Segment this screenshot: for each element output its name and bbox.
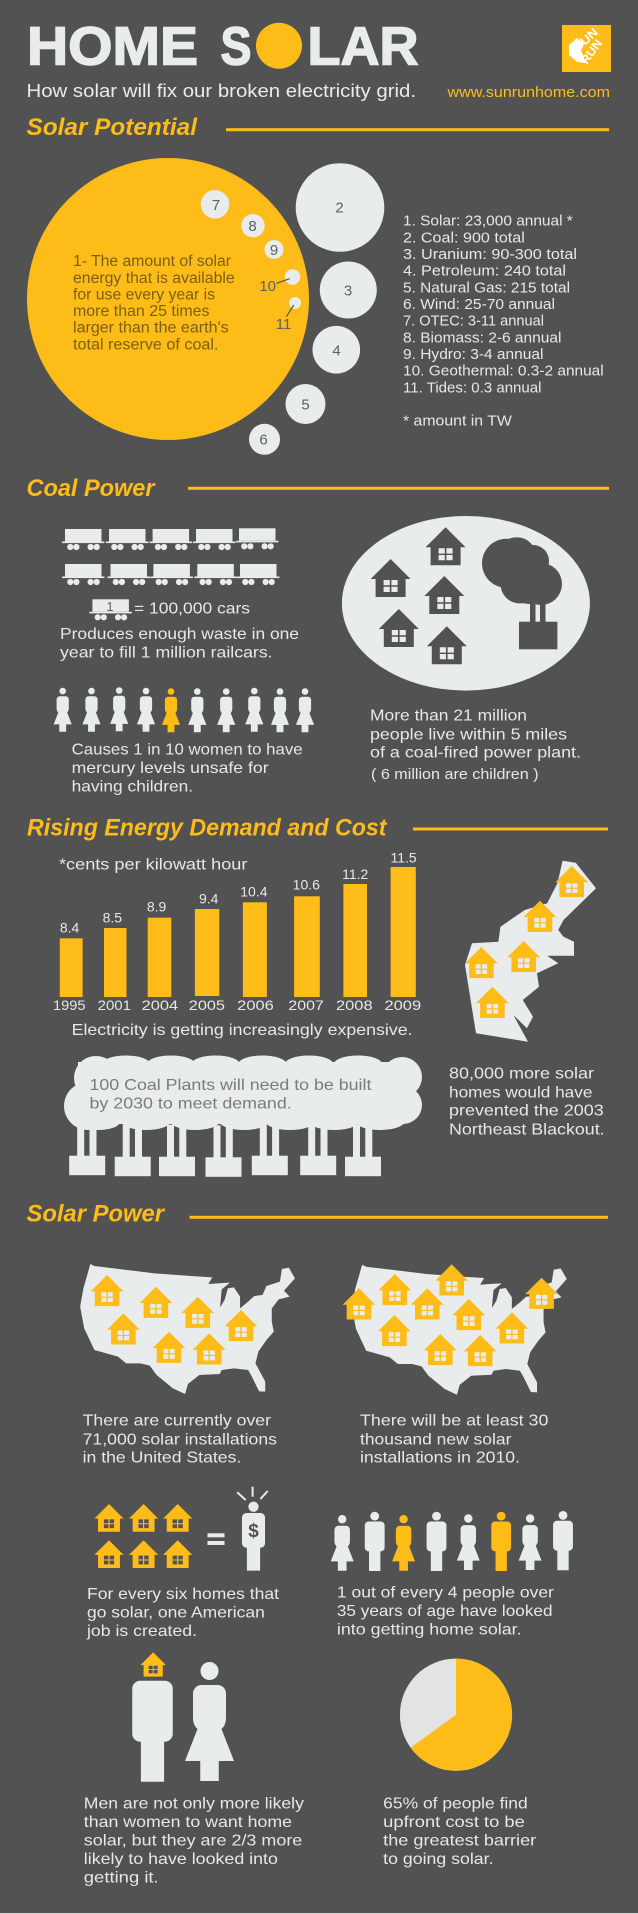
text: railcars waste [60,626,299,661]
bar values: 11.5 [390,849,417,865]
text: northeast blackout: 80,000 more solar [449,1066,595,1083]
text: mercury levels: having children. [72,778,193,795]
circle numbers: 5 [301,396,310,414]
circle numbers: 6 [259,432,268,448]
bar values: 8.9 [147,899,167,915]
heading: coal power: Coal Power [26,475,156,502]
text: jobs created: For every six homes that [87,1586,280,1603]
icon: coal plants [69,1124,381,1177]
text: people near plants: More than 21 million [370,708,527,725]
text: mercury levels: Causes 1 in 10 women to have [72,742,303,759]
icon: solar homes [343,1264,558,1366]
text: upfront cost [383,1795,537,1868]
bar values: 8.5 [103,910,122,926]
bar values: 9.4 [199,890,219,906]
legend list: energy totals: 1. Solar: 23,000 annual * [403,214,573,230]
chart caption: Electricity is getting increasingly expensive. [72,1022,413,1039]
subtitle: How solar will fix our broken electricity grid. [26,81,416,101]
map: current installations [80,1264,295,1394]
worker figure [237,1487,268,1571]
icon: sunrun logo [562,25,611,72]
year labels: 2001 [98,997,131,1013]
solar potential text: total reserve of coal. [73,336,218,353]
text: people over 35 [337,1585,555,1638]
legend list: energy totals: 4. Petroleum: 240 total [403,264,566,280]
text: people near plants [370,708,581,783]
text: new installations: thousand new solar [360,1431,512,1448]
worker figure: $ [248,1521,259,1542]
bar values [60,849,417,935]
text: people near plants: people live within 5 miles [370,726,567,743]
year labels: 1995 [53,997,86,1013]
bar values: 11.2 [342,866,369,882]
text: northeast blackout: Northeast Blackout. [449,1121,605,1138]
solar potential text [73,253,235,353]
icon: sunrun logo: SUN [571,25,601,54]
circle numbers: 8 [248,218,257,235]
cloud text: 100 Coal Plants will need to be built [90,1077,372,1094]
pie chart: 65 percent [400,1659,512,1771]
six homes [94,1504,192,1568]
icon: solar homes [465,866,588,1018]
title: HOME [27,16,198,76]
year labels: 2004 [142,997,178,1013]
railcar legend: 1 [106,599,114,614]
text: northeast blackout: prevented the 2003 [449,1103,604,1120]
note: units: *cents per kilowatt hour [59,856,248,873]
year labels: 2005 [189,997,225,1013]
solar potential text: for use every year is [73,286,215,303]
legend list: energy totals: 6. Wind: 25-70 annual [403,297,555,313]
text: people over 35: 35 years of age have looked [337,1603,552,1620]
text: current installations: 71,000 solar installations [83,1431,277,1448]
icon: solar homes [91,1275,257,1364]
text: people near plants: of a coal-fired power plant. [370,745,581,762]
icon: ten women [54,687,314,732]
energy source circles [201,163,384,455]
circle numbers: 4 [332,342,341,360]
map: northeast with houses [465,861,596,1042]
legend list: energy totals: 10. Geothermal: 0.3-2 annual [403,364,604,380]
bars [60,867,416,997]
solar potential text: energy that is available [73,270,235,287]
solar potential text: more than 25 times [73,303,210,320]
circle numbers [212,197,352,448]
text: mercury levels: mercury levels unsafe for [72,760,269,777]
heading: solar power: Solar Power [26,1201,166,1228]
text: current installations: There are currently over [83,1413,272,1430]
text: current installations: in the United States. [83,1450,241,1467]
circle numbers: 3 [344,282,352,300]
legend list: energy totals: 9. Hydro: 3-4 annual [403,347,544,363]
text: upfront cost: 65% of people find [383,1795,528,1812]
equals sign [208,1533,224,1545]
text: men vs women: Men are not only more likely [84,1795,304,1812]
text: current installations [83,1413,277,1467]
text: new installations: There will be at least 30 [360,1413,549,1430]
heading: rising energy demand and cost [27,815,608,842]
railcar legend [89,599,250,620]
railcar legend: = 100,000 cars [134,601,250,618]
website link: www.sunrunhome.com [446,84,610,101]
legend list: energy totals: 5. Natural Gas: 215 total [403,280,570,296]
panel: coal plants under a smoke cloud [64,1056,422,1177]
legend list: energy totals: * amount in TW [403,414,512,430]
smoke cloud [64,1056,422,1130]
circle numbers: 9 [270,242,278,259]
circle numbers: 7 [212,197,220,214]
bar chart: electricity cost [53,849,421,1013]
title [27,16,418,76]
text: upfront cost: the greatest barrier [383,1832,537,1849]
text: upfront cost: to going solar. [383,1851,494,1868]
panel: neighbourhood near coal plant [342,516,590,691]
year labels: 2006 [237,997,274,1013]
icon: six homes equal one job [94,1487,268,1571]
icon: railcars [62,528,280,585]
legend list: energy totals: 8. Biomass: 2-6 annual [403,330,561,346]
year labels: 2009 [384,997,421,1013]
solar circle [27,158,309,440]
text: men vs women: getting it. [84,1869,159,1886]
text: men vs women: than women to want home [84,1814,292,1831]
text: northeast blackout [449,1066,605,1138]
icon: sunrun logo: RUN [578,37,605,67]
bar values: 8.4 [60,919,80,935]
text: railcars waste: year to fill 1 million railcars. [60,644,273,661]
text: people over 35: into getting home solar. [337,1621,522,1638]
cloud text: by 2030 to meet demand. [90,1096,292,1113]
title: S [220,16,252,76]
heading: solar power [26,1201,608,1228]
icon: eight people [331,1511,573,1571]
bar values: 10.4 [240,884,268,900]
icon: power plant with smoke [482,537,562,649]
text: men vs women: solar, but they are 2/3 more [84,1832,302,1849]
solar potential text: 1- The amount of solar [73,253,231,270]
text: jobs created [86,1586,280,1640]
circle numbers: 10 [259,278,276,295]
heading: solar potential [26,114,609,141]
title: LAR [308,16,418,76]
year labels [53,997,421,1013]
text: jobs created: go solar, one American [87,1604,265,1621]
text: railcars waste: Produces enough waste in one [60,626,299,643]
text: upfront cost: upfront cost to be [383,1814,525,1831]
cloud text [90,1077,372,1113]
icon: houses [371,527,467,664]
bar values: 10.6 [293,876,320,892]
year labels: 2007 [288,997,324,1013]
year labels: 2008 [336,997,373,1013]
icon: man with house and woman [132,1652,234,1782]
legend list: energy totals: 7. OTEC: 3-11 annual [403,314,544,330]
legend list: energy totals: 3. Uranium: 90-300 total [403,247,577,263]
map: new installations [343,1264,567,1395]
text: new installations [360,1413,549,1467]
panel: solar potential circles [27,158,384,455]
text: new installations: installations in 2010. [360,1450,520,1467]
text: men vs women [84,1795,304,1886]
legend list: energy totals: 2. Coal: 900 total [403,230,525,246]
circle numbers: 2 [335,200,344,216]
heading: coal power [26,475,609,502]
text: northeast blackout: homes would have [449,1084,593,1101]
text: men vs women: likely to have looked into [84,1851,278,1868]
legend list: energy totals [403,214,604,430]
circle numbers: 11 [276,316,291,333]
text: people over 35: 1 out of every 4 people over [337,1585,555,1602]
text: mercury levels [72,742,303,795]
heading: solar potential: Solar Potential [26,114,198,141]
text: people near plants: ( 6 million are children ) [371,767,539,783]
solar potential text: larger than the earth's [73,320,229,337]
text: jobs created: job is created. [86,1623,197,1640]
pointer lines [277,279,294,317]
heading: rising energy demand and cost: Rising Energy Demand and Cost [27,815,387,842]
legend list: energy totals: 11. Tides: 0.3 annual [403,380,542,396]
